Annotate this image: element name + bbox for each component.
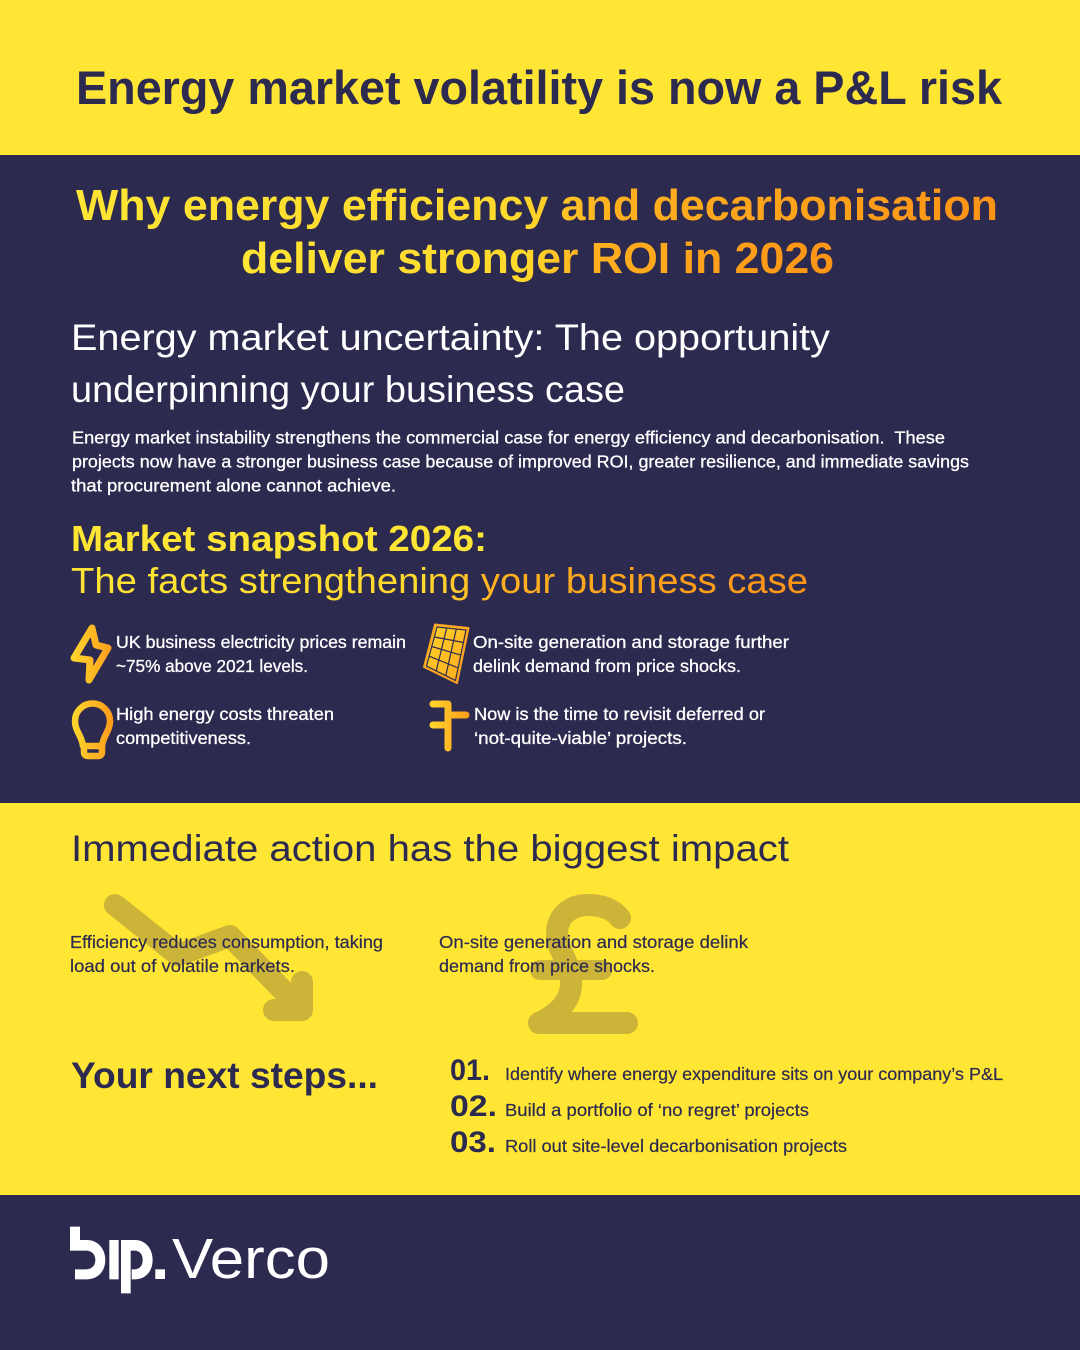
section heading: uncertainty: Energy market uncertainty: The opportunity — [71, 317, 831, 358]
text: efficiency: Efficiency reduces consumption, taking — [70, 932, 383, 952]
icon: lightning bolt — [74, 628, 108, 680]
section heading: uncertainty — [71, 317, 831, 410]
icon: pound sign — [539, 905, 627, 1023]
title: Energy market volatility is now a P&L risk — [76, 61, 1003, 114]
step 1: Identify where energy expenditure sits on your company’s P&L — [505, 1064, 1003, 1084]
step 1: 01. — [450, 1054, 490, 1087]
fact: deferred projects: Now is the time to revisit deferred or — [474, 704, 765, 724]
subtitle: deliver stronger ROI in 2026 — [241, 234, 834, 283]
subtitle: Why energy efficiency and decarbonisation — [76, 181, 998, 230]
icon: solar panel — [424, 624, 468, 683]
text: efficiency — [70, 932, 383, 976]
intro paragraph: Energy market instability strengthens the commercial case for energy efficiency and decarbonisation. These — [72, 428, 945, 448]
icon: pylon — [433, 704, 466, 748]
heading: market snapshot: Market snapshot 2026: — [71, 518, 487, 559]
step 2: 02. — [450, 1090, 497, 1123]
panel: market context — [0, 155, 1080, 803]
text: on-site generation — [439, 932, 748, 976]
fact: electricity prices: ~75% above 2021 levels. — [116, 656, 308, 676]
heading: immediate action: Immediate action has the biggest impact — [71, 828, 790, 869]
fact: deferred projects: ‘not-quite-viable’ projects. — [474, 728, 687, 748]
fact: on-site generation: On-site generation and storage further — [473, 632, 789, 652]
icon: falling arrow — [115, 905, 302, 1010]
fact: electricity prices — [116, 632, 406, 676]
step 1 — [450, 1054, 1003, 1087]
step 3: 03. — [450, 1126, 496, 1159]
fact: on-site generation: delink demand from price shocks. — [473, 656, 741, 676]
fact: competitiveness: High energy costs threaten — [116, 704, 334, 724]
heading: market snapshot: The facts strengthening your business case — [71, 560, 808, 601]
intro paragraph: projects now have a stronger business case because of improved ROI, greater resilience, and immediate savings — [72, 452, 969, 472]
subtitle — [76, 181, 998, 283]
text: efficiency: load out of volatile markets. — [70, 956, 295, 976]
step 2 — [450, 1090, 809, 1123]
panel: immediate action — [0, 803, 1080, 1195]
heading: market snapshot — [71, 518, 808, 601]
fact: electricity prices: UK business electricity prices remain — [116, 632, 406, 652]
logo: bip — [70, 1227, 165, 1293]
fact: deferred projects — [474, 704, 765, 748]
logo: Verco: Verco — [172, 1227, 330, 1291]
text: on-site generation: On-site generation and storage delink — [439, 932, 748, 952]
text: on-site generation: demand from price shocks. — [439, 956, 655, 976]
step 2: Build a portfolio of ‘no regret’ projects — [505, 1100, 809, 1120]
step 3 — [450, 1126, 847, 1159]
icon: light bulb — [75, 704, 110, 756]
fact: competitiveness — [116, 704, 334, 748]
step 3: Roll out site-level decarbonisation projects — [505, 1136, 847, 1156]
section heading: uncertainty: underpinning your business case — [71, 369, 625, 410]
top banner — [0, 0, 1080, 155]
heading: next steps: Your next steps... — [71, 1055, 378, 1096]
footer — [0, 1195, 1080, 1350]
fact: on-site generation — [473, 632, 789, 676]
intro paragraph: that procurement alone cannot achieve. — [71, 476, 396, 496]
intro paragraph — [71, 428, 969, 496]
fact: competitiveness: competitiveness. — [116, 728, 251, 748]
